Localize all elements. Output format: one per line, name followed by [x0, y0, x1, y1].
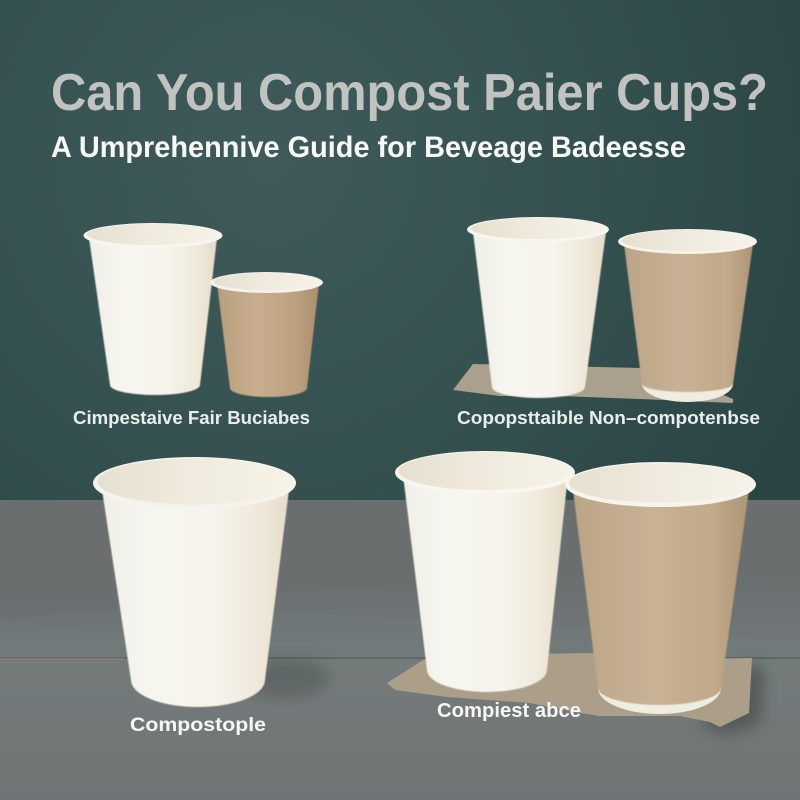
shadow — [700, 660, 765, 735]
cup: white — [395, 451, 575, 692]
shadow — [240, 658, 330, 698]
panel: top left cup pair — [73, 223, 323, 428]
paper mat — [453, 364, 733, 403]
label: Copopsttaible Non–compotenbse — [457, 408, 760, 428]
label: Compostople — [130, 715, 266, 736]
cup: kraft with white base — [618, 229, 757, 402]
title: Can You Compost Paier Cups? — [51, 64, 768, 122]
label: Cimpestaive Fair Buciabes — [73, 408, 310, 428]
torn cardboard mat — [387, 653, 752, 727]
cup: large white — [93, 457, 296, 707]
background: concrete floor — [0, 500, 800, 800]
subtitle: A Umprehennive Guide for Beveage Badeesse — [51, 131, 686, 164]
cup: small kraft — [210, 272, 323, 397]
panel: bottom left cup — [93, 457, 330, 736]
panel: bottom right cup pair — [387, 451, 765, 735]
panel: top right cup pair — [453, 217, 760, 428]
cup: white — [467, 217, 609, 398]
cup: tall white — [84, 223, 222, 395]
label: Compiest abce — [437, 700, 581, 722]
background: teal wall — [0, 0, 800, 502]
cup: kraft with white base — [565, 462, 756, 714]
